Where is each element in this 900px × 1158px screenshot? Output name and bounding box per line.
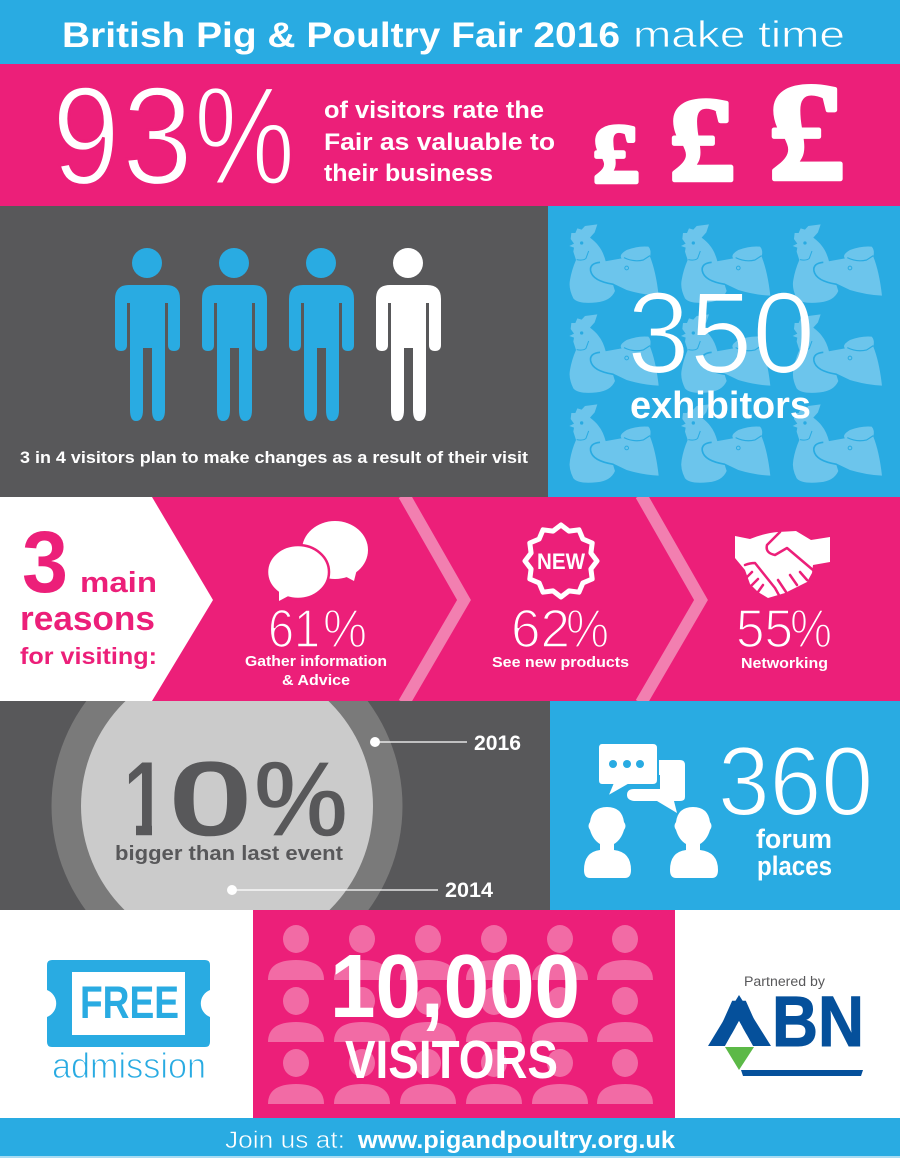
panel: 350 exhibitors — [548, 206, 900, 497]
valuable text: their business — [324, 160, 493, 187]
bigger label: bigger than last event — [115, 842, 343, 865]
callout: 2016 — [370, 732, 521, 755]
stat: 62%: % — [566, 599, 609, 659]
valuable text — [324, 97, 555, 187]
icon: forum discussion — [584, 743, 718, 878]
forum places label: places — [757, 851, 832, 881]
icon: blue visitor 3 — [289, 248, 354, 421]
stat: 61% — [268, 599, 367, 659]
visitors label: VISITORS — [345, 1030, 558, 1090]
title banner — [0, 0, 900, 64]
callout: 2016: 2016 — [474, 732, 521, 755]
label: networking: Networking — [741, 655, 828, 672]
audience pattern — [268, 925, 653, 1104]
footer banner — [0, 1118, 900, 1158]
icon: blue visitor 2 — [202, 248, 267, 421]
stat: 61%: 61 — [268, 599, 320, 659]
panel: ABN partner — [708, 974, 864, 1076]
stat: 55% — [736, 599, 832, 659]
footer banner: Join us at: — [225, 1127, 345, 1154]
chart: comparison circles — [52, 701, 402, 910]
icon: pound signs: £ — [768, 55, 845, 210]
93 percent stat — [52, 57, 295, 214]
stat: 62%: 62 — [511, 599, 570, 659]
icon: ticket — [47, 960, 210, 1047]
admission label: admission — [52, 1045, 206, 1086]
icon: handshake — [735, 531, 830, 598]
icon: new badge: NEW — [537, 549, 585, 574]
heading: 3 main reasons: for visiting: — [20, 643, 157, 669]
label: see new products: See new products — [492, 654, 629, 671]
stat: 62% — [511, 599, 609, 659]
10 percent stat: % — [254, 738, 348, 859]
chicken and pig pattern — [569, 224, 882, 483]
panel: free admission: FREE — [80, 977, 179, 1028]
chevron arrow 1 — [404, 495, 464, 703]
partnered label: Partnered by — [744, 974, 825, 989]
panel: 10,000 visitors — [253, 910, 675, 1118]
logo: ABN: BN — [772, 983, 864, 1062]
10 percent stat: 1 — [123, 738, 167, 859]
panel: 93% valuable — [0, 55, 900, 214]
title banner: make time — [633, 14, 845, 55]
icon: pound signs: £ — [593, 108, 639, 201]
title banner: British Pig & Poultry Fair 2016 — [62, 16, 620, 55]
exhibitors label: exhibitors — [630, 385, 811, 427]
heading: 3 main reasons: main — [80, 567, 157, 599]
label: gather information — [245, 653, 387, 689]
stat: 55%: 55 — [736, 599, 793, 659]
93 percent stat: % — [194, 57, 295, 214]
forum places label: forum — [756, 824, 832, 854]
panel: free admission — [47, 960, 210, 1086]
heading: 3 main reasons — [20, 514, 157, 669]
icon: pound signs — [593, 55, 845, 210]
360 number: 360 — [718, 726, 873, 836]
panel: reasons band — [0, 495, 900, 703]
icon: speech bubbles — [267, 521, 368, 601]
stat: 55%: % — [790, 599, 832, 659]
icon: new badge — [525, 525, 597, 597]
panel: 3 in 4 visitors — [0, 206, 548, 497]
350 number: 350 — [627, 268, 815, 398]
label: gather information: & Advice — [282, 672, 350, 689]
footer banner: www.pigandpoultry.org.uk — [357, 1127, 675, 1154]
icon: pound signs: £ — [669, 73, 735, 206]
logo: ABN — [708, 983, 864, 1076]
panel: 360 forum places — [550, 701, 900, 910]
10 percent stat — [118, 738, 348, 859]
callout: 2014 — [227, 879, 493, 902]
93 percent stat: 9 — [52, 57, 120, 214]
stat: 61%: % — [323, 599, 367, 659]
icon: blue visitor 1 — [115, 248, 180, 421]
valuable text: Fair as valuable to — [324, 129, 555, 156]
valuable text: of visitors rate the — [324, 97, 544, 124]
label: gather information: Gather information — [245, 653, 387, 670]
10,000 number: 10,000 — [330, 937, 580, 1037]
forum places label — [756, 824, 832, 881]
heading: 3 main reasons: reasons — [20, 600, 155, 638]
panel: 10% bigger — [0, 701, 550, 910]
10 percent stat: 0 — [167, 738, 254, 859]
chevron arrow 2 — [641, 495, 701, 703]
heading: 3 main reasons: 3 — [22, 514, 68, 611]
icon: white visitor — [376, 248, 441, 421]
93 percent stat: 3 — [122, 57, 193, 214]
logo: ABN: A — [710, 986, 768, 1060]
callout: 2014: 2014 — [445, 879, 493, 902]
caption: 3 in 4 visitors plan to make changes as a result of their visit — [20, 449, 529, 467]
